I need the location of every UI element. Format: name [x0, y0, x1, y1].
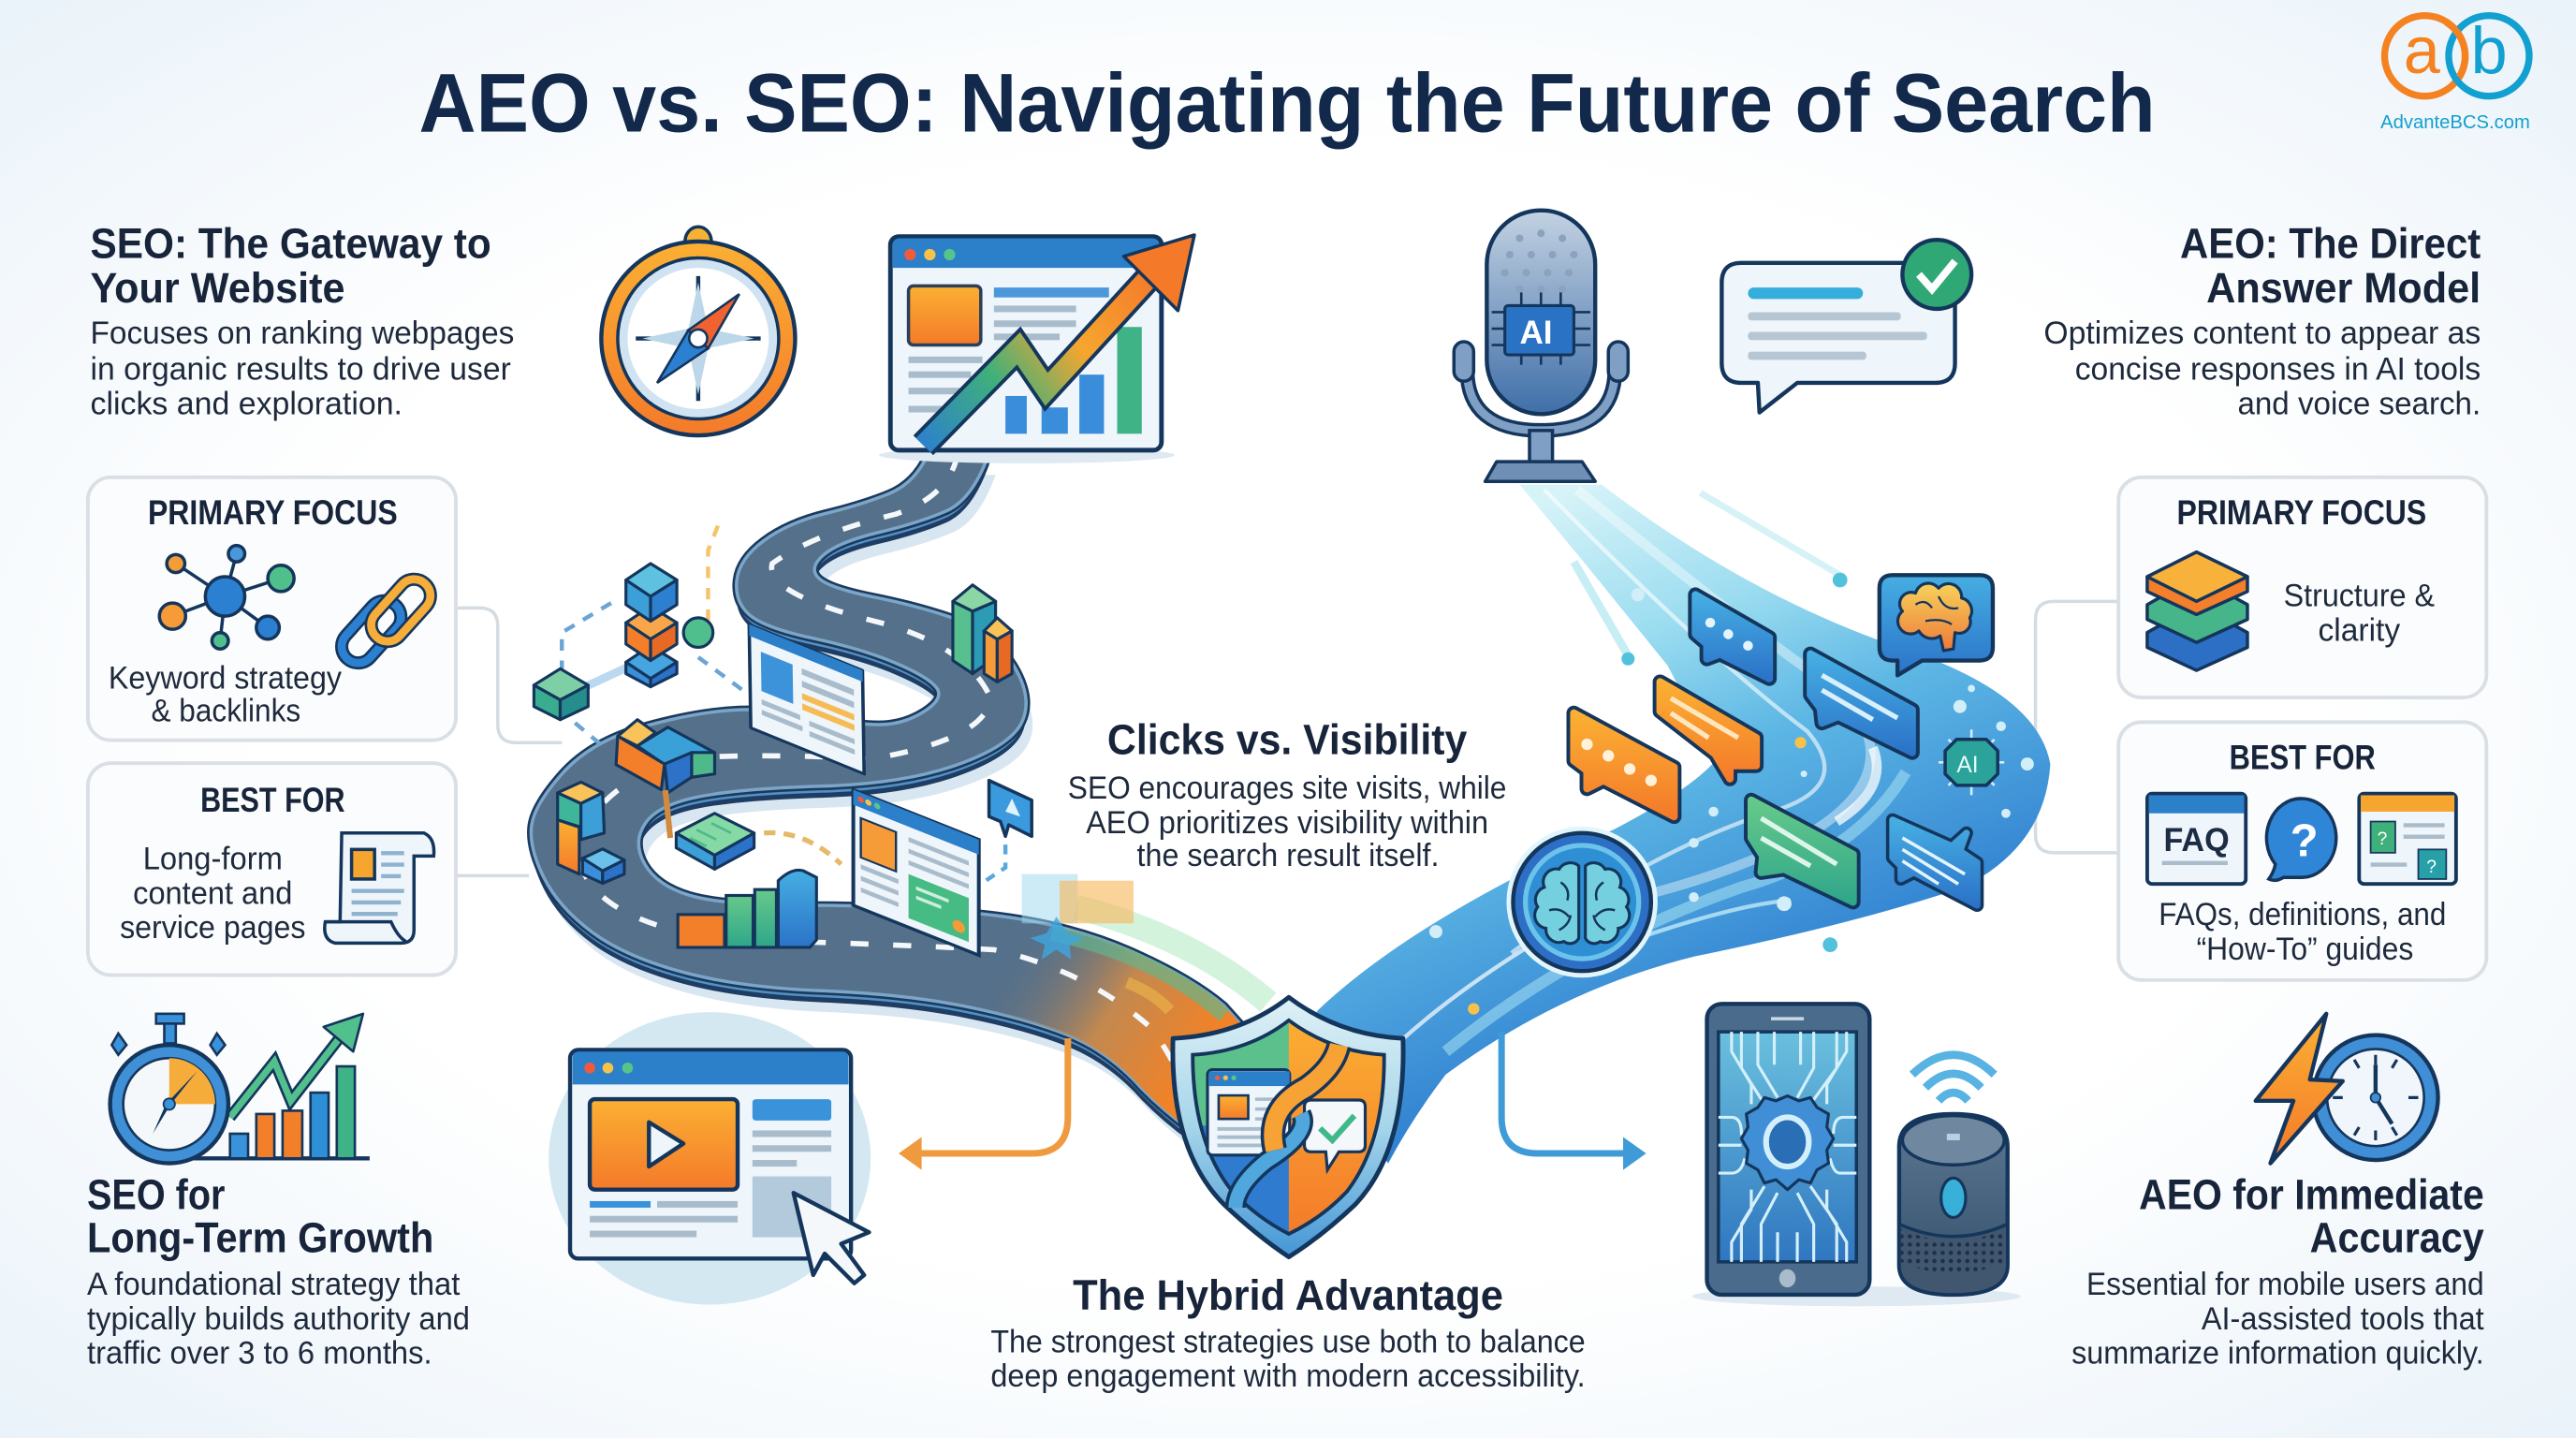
green tile block [676, 814, 754, 869]
center text: clicks vs visibility: AEO prioritizes visibility within [1086, 805, 1488, 841]
icon: how-to guide window: ? [2426, 858, 2437, 877]
panel: SEO best for: Long-form [143, 841, 283, 876]
SEO intro text: Focuses on ranking webpages [91, 315, 514, 351]
icon: how-to guide window [2359, 794, 2456, 884]
center text: clicks vs visibility: the search result itself. [1137, 838, 1439, 873]
icon: answer chat bubble with check [1721, 240, 1971, 413]
AI answer stream [1298, 485, 2050, 1164]
panel: AEO primary focus: clarity [2318, 612, 2401, 648]
mouse cursor [794, 1193, 869, 1284]
SEO long-term text: typically builds authority and [87, 1301, 470, 1337]
icon: tilted webpage on road (upper) [749, 624, 864, 774]
panel: AEO primary focus [2118, 477, 2486, 697]
pale blue bubble [1893, 820, 1977, 905]
icon: AI hexagon chip [1939, 729, 2004, 795]
SEO intro text: in organic results to drive user [91, 351, 511, 387]
SEO intro text: clicks and exploration. [91, 386, 402, 421]
panel: AEO best for: BEST FOR [2230, 738, 2376, 776]
icon: FAQ window: FAQ [2163, 822, 2230, 858]
arrow: to AEO devices [1501, 1032, 1647, 1170]
AEO immediate accuracy text: Accuracy [2310, 1213, 2484, 1261]
icon: smartphone with circuit [1692, 1004, 2021, 1306]
panel: SEO primary focus: PRIMARY FOCUS [148, 493, 398, 532]
AEO immediate accuracy text [2071, 1171, 2484, 1372]
logo: AdvanteBCS: AdvanteBCS.com [2380, 112, 2530, 133]
SEO long-term text: traffic over 3 to 6 months. [87, 1336, 432, 1372]
icon: smart speaker with wifi [1899, 1055, 2008, 1295]
panel: AEO primary focus: Structure & [2284, 579, 2435, 614]
shield: hybrid advantage [1173, 997, 1403, 1257]
logo: AdvanteBCS: b [2471, 13, 2508, 87]
icon: chain link [335, 572, 437, 669]
AEO intro text: and voice search. [2237, 386, 2481, 421]
orange bubble with dots [1573, 713, 1674, 816]
green bubble [1751, 800, 1853, 902]
chat bubbles in stream [1573, 575, 1993, 905]
hybrid advantage text: The Hybrid Advantage [1073, 1271, 1503, 1319]
orange bubble with lines [1661, 682, 1756, 779]
panel: AEO best for [2118, 722, 2486, 980]
icon: AI hexagon chip: AI [1956, 753, 1979, 778]
panel: SEO best for: BEST FOR [200, 781, 345, 819]
AEO intro text: concise responses in AI tools [2075, 351, 2481, 387]
icon: tilted webpage on road (lower) [854, 789, 979, 955]
AEO intro text: AEO: The Direct [2180, 220, 2481, 268]
icon: data cubes with dashed links [534, 526, 742, 748]
icon: AI microphone [1454, 211, 1628, 481]
icon: scroll document [325, 833, 434, 943]
icon: FAQ window [2147, 794, 2246, 884]
icon: clock with lightning bolt [2256, 1014, 2438, 1164]
AEO immediate accuracy text: summarize information quickly. [2071, 1336, 2484, 1372]
SEO intro text [91, 220, 514, 421]
icon: layered stack [2147, 552, 2247, 670]
dashed routes and pointer [764, 781, 1032, 881]
bar chart on road [678, 870, 816, 947]
icon: compass [601, 227, 795, 435]
panel: SEO primary focus: Keyword strategy [109, 660, 343, 696]
brain speech box [1880, 575, 1993, 675]
panel: AEO primary focus: PRIMARY FOCUS [2177, 493, 2426, 532]
AEO immediate accuracy text: Essential for mobile users and [2086, 1267, 2484, 1302]
panel: SEO best for [88, 763, 456, 976]
hybrid advantage text [990, 1271, 1586, 1394]
left tower stack [558, 782, 624, 884]
icon: brain circle [1506, 827, 1658, 977]
AEO intro text: Answer Model [2206, 264, 2481, 312]
orange drip line [666, 790, 670, 838]
panel: SEO best for: content and [133, 875, 292, 911]
icon: ranking browser with growth arrow [879, 235, 1194, 463]
AEO immediate accuracy text: AI-assisted tools that [2202, 1301, 2484, 1337]
mini check chat [1305, 1100, 1365, 1170]
title: AEO vs. SEO: Navigating the Future of Search [419, 55, 2156, 149]
icon: stopwatch with growth chart [110, 1014, 370, 1164]
icon: keyword network [159, 546, 294, 649]
hybrid advantage text: The strongest strategies use both to balance [990, 1324, 1586, 1359]
connector lines: left panels to road [457, 608, 562, 875]
icon: question bubble: ? [2291, 815, 2319, 866]
mini browser [1208, 1070, 1290, 1155]
SEO long-term text: Long-Term Growth [87, 1213, 433, 1261]
arrow: to SEO video page [899, 1038, 1068, 1170]
SEO long-term text [87, 1171, 470, 1372]
center text: clicks vs visibility: SEO encourages site visits, while [1068, 770, 1506, 806]
SEO intro text: Your Website [91, 264, 345, 312]
panel: AEO best for: FAQs, definitions, and [2159, 897, 2446, 932]
SEO intro text: SEO: The Gateway to [91, 220, 491, 268]
blue bubble with lines [1810, 654, 1912, 753]
icon: AI microphone: AI [1519, 315, 1553, 351]
connector lines: right panels to stream [2036, 601, 2117, 853]
icon: video browser with cursor [549, 1012, 871, 1304]
logo: AdvanteBCS: a [2404, 13, 2441, 87]
center text: clicks vs visibility: Clicks vs. Visibility [1107, 716, 1468, 764]
AEO immediate accuracy text: AEO for Immediate [2139, 1171, 2484, 1219]
panel: SEO best for: service pages [120, 910, 305, 946]
floating color tiles on road [1022, 874, 1134, 960]
SEO long-term text: A foundational strategy that [87, 1267, 461, 1302]
icon: block clusters on road [558, 720, 754, 884]
icon: how-to guide window: ? [2378, 829, 2388, 849]
SEO long-term text: SEO for [87, 1171, 226, 1219]
AEO intro text [2043, 220, 2481, 421]
panel: SEO primary focus [88, 477, 456, 741]
logo: AdvanteBCS [2380, 13, 2530, 133]
hybrid advantage text: deep engagement with modern accessibility. [990, 1358, 1586, 1394]
AEO intro text: Optimizes content to appear as [2043, 315, 2481, 351]
orange and blue ribbons [1236, 1045, 1339, 1208]
panel: SEO primary focus: & backlinks [151, 693, 300, 728]
center text: clicks vs visibility [1068, 716, 1506, 873]
icon: tall building bars [953, 585, 1012, 682]
winding SEO road [531, 453, 1271, 1171]
icon: question bubble [2266, 799, 2336, 880]
pale green trail beside road [1076, 907, 1268, 1003]
panel: AEO best for: “How-To” guides [2197, 932, 2413, 967]
blue bubble with dots [1695, 594, 1769, 679]
